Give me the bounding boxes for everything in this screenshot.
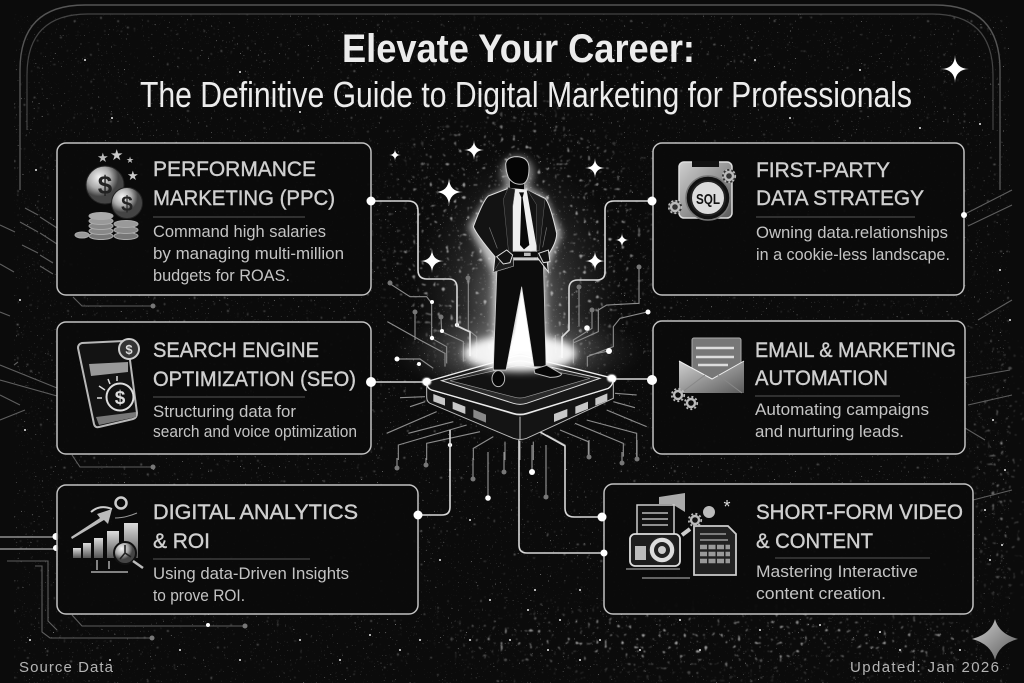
connector nodes [366,196,967,556]
panel: first-party data [653,143,964,295]
icon: phone with dollar [78,339,139,427]
panel: search engine optimization [57,322,371,454]
description [153,223,344,285]
heading: OPTIMIZATION (SEO) [153,368,356,391]
icon: phone with dollar: $ [125,342,133,357]
heading: SEARCH ENGINE [153,339,319,362]
description [756,224,950,264]
icon: coins and stars: $ [121,193,133,216]
heading: DATA STRATEGY [756,187,924,210]
description: budgets for ROAS. [153,267,290,285]
heading: EMAIL & MARKETING [755,339,956,362]
icon: SQL database: SQL [696,191,720,208]
heading [153,339,356,391]
title: Elevate Your Career: [342,27,695,71]
description [153,565,349,605]
description [153,403,357,441]
icon: coins and stars [75,146,142,240]
icon: coins and stars: ★ [126,156,134,166]
main connectors [371,201,652,553]
description: in a cookie-less landscape. [756,246,950,264]
icon: phone with dollar: $ [115,388,126,409]
circuit traces [0,190,1012,640]
glow: figure outline [463,156,577,372]
central glow [393,150,643,450]
panel: short-form video [604,484,973,614]
central figure on platform [422,156,616,441]
outer frame [20,5,1000,190]
footer: source: Source Data [19,659,114,676]
icon: camera, documents and gear: * [723,497,731,517]
icon: coins and stars: ★ [97,151,109,166]
heading: PERFORMANCE [153,158,316,181]
description [755,401,929,441]
icon: coins and stars: $ [98,170,113,200]
icon: SQL database [668,161,736,220]
description: to prove ROI. [153,587,245,605]
description: search and voice optimization [153,423,357,441]
heading [153,501,358,553]
heading: & CONTENT [756,530,873,553]
heading: FIRST-PARTY [756,159,890,182]
description: content creation. [756,585,886,603]
panel: performance marketing [57,143,371,295]
platform [422,353,616,441]
description: Using data-Driven Insights [153,565,349,583]
description: Command high salaries [153,223,326,241]
heading [755,339,956,390]
heading: DIGITAL ANALYTICS [153,501,358,524]
description: and nurturing leads. [755,423,904,441]
heading [756,159,924,210]
description: Mastering Interactive [756,563,918,581]
heading: SHORT-FORM VIDEO [756,501,963,524]
panel: email automation [653,321,965,454]
heading: MARKETING (PPC) [153,187,335,210]
heading [756,501,963,553]
sparkles [389,55,969,273]
icon: envelope and gears [672,338,744,409]
panel: digital analytics [57,485,418,614]
heading [153,158,335,210]
description [756,563,918,603]
person silhouette [473,157,562,387]
heading: & ROI [153,530,210,553]
icon: coins and stars: ★ [127,169,139,184]
description: Automating campaigns [755,401,929,419]
icon: camera, documents and gear [626,493,736,578]
icon: four-point star [972,619,1018,660]
description: Owning data.relationships [756,224,948,242]
icon: bar chart with magnifier [71,498,143,572]
title [140,27,912,115]
footer: updated: Updated: Jan 2026 [850,659,999,676]
icon: coins and stars: ★ [110,146,123,164]
heading: AUTOMATION [755,367,888,390]
description: by managing multi-million [153,245,344,263]
description: Structuring data for [153,403,297,421]
